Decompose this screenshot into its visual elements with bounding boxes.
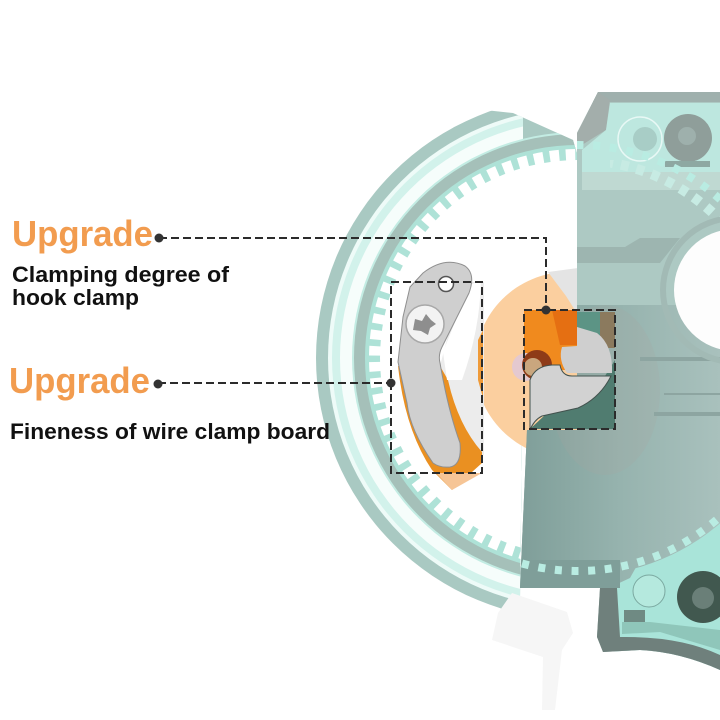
dark post (664, 114, 712, 162)
hook clamp detail window (512, 310, 615, 430)
heading: upgrade 2: Upgrade (9, 360, 150, 401)
rivet hole (438, 276, 454, 292)
white pull tab (492, 593, 573, 710)
gray backing (440, 282, 484, 455)
gear wheel assembly (316, 110, 577, 608)
hook clamp assembly (398, 262, 484, 490)
brown corner (600, 312, 615, 348)
ridge lines (640, 357, 720, 416)
label: clamping degree: Clamping degree of (12, 262, 230, 287)
screw (406, 305, 444, 343)
callout connector: hook clamp (159, 238, 615, 429)
white circular opening (674, 229, 720, 351)
orange clamp plate (398, 366, 482, 490)
silver hook lower (530, 365, 611, 430)
upper body panel (577, 92, 720, 312)
teal window (582, 103, 720, 172)
gear teeth through body (610, 160, 720, 217)
gray plate at top of disc (548, 268, 578, 315)
peach clamp tip (436, 473, 482, 490)
ghost circle (633, 127, 657, 151)
peach disc (475, 272, 661, 458)
tinted shade (550, 305, 660, 475)
dark band (577, 238, 680, 263)
teal corner (577, 312, 601, 344)
lower body panel (520, 305, 720, 568)
silver hook upper (561, 327, 612, 373)
label: hook clamp: hook clamp (12, 285, 139, 310)
label: fineness: Fineness of wire clamp board (10, 419, 330, 444)
small lower circle (633, 575, 665, 607)
lower dark border (597, 588, 720, 670)
silver clamp arm (398, 262, 472, 467)
top gray band (593, 92, 720, 102)
white fin (443, 280, 481, 380)
light band (582, 172, 720, 190)
connector dots (154, 234, 550, 388)
lower dark post (677, 571, 720, 623)
heading: upgrade 1: Upgrade (12, 213, 153, 254)
lower teal area (617, 524, 720, 670)
callout connector: wire clamp board (158, 282, 482, 473)
dark orange sliver (478, 330, 483, 398)
lower gear teeth (521, 141, 720, 575)
dark teal corner (530, 360, 615, 429)
ring around opening (663, 218, 720, 362)
transparent device body (520, 92, 720, 670)
